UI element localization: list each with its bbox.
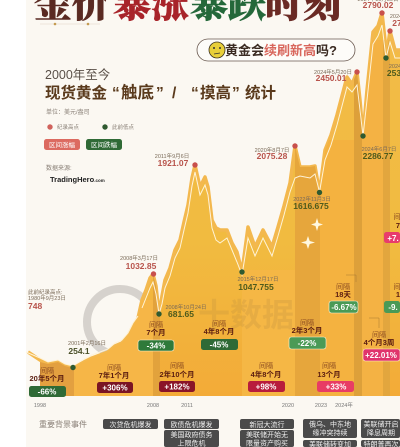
- timeline years: [34, 401, 353, 409]
- interval: 1980-2001: 20年5个月: [29, 373, 65, 383]
- interval: 1980-2001: -66%: [38, 388, 56, 396]
- interval: 2020-2022: 间隔: [300, 318, 314, 327]
- interval: 2015-2020: 间隔: [259, 361, 273, 370]
- data source: TradingHero.com: [50, 175, 105, 184]
- interval: 4 years 3 months: 4个月3周: [364, 338, 394, 347]
- event: 2024: 降息周期: [367, 428, 395, 437]
- icon: thinking face: [209, 42, 225, 58]
- legend: 此前低点: [112, 123, 135, 131]
- interval: 2001-2008: [97, 363, 133, 393]
- interval: 2008 fall: 7个月: [146, 328, 166, 337]
- watermark ring: [87, 289, 153, 355]
- interval tags: [29, 213, 400, 397]
- label: 1980 record: 此前纪录高点:: [28, 288, 63, 296]
- event: 2011: 美国政府债务: [170, 430, 212, 439]
- label: 2024 May high: [314, 68, 360, 83]
- event: 2011: [164, 419, 219, 447]
- label: latest peak: 2790.02: [363, 0, 394, 10]
- event: 2023: 俄乌、中东地: [309, 420, 351, 428]
- legend: 纪录高点: [57, 123, 80, 131]
- peak and low labels: [28, 0, 400, 370]
- interval: 18 days: 18天: [335, 290, 351, 299]
- label: 1980 record: [28, 288, 66, 311]
- interval: 2008 fall: 间隔: [149, 320, 163, 329]
- interval: right partial down: [384, 283, 400, 313]
- interval: 2008-2011: [159, 361, 195, 392]
- heading: 触底: [121, 82, 154, 102]
- label: 2024 May high: 2450.01: [316, 73, 347, 83]
- interval: 2011-2015: 4年8个月: [204, 326, 234, 336]
- unit: 单位：美元/盎司: [46, 108, 90, 116]
- timeline years: 1998: [34, 403, 46, 409]
- interval: 2015-2020: [248, 361, 285, 392]
- interval: 2001-2008: 间隔: [107, 363, 121, 372]
- interval: 2011-2015: -45%: [210, 340, 228, 350]
- interval: 2015-2020: 4年8个月: [251, 369, 281, 379]
- title: [34, 0, 341, 26]
- label: 2020 high: [255, 143, 298, 161]
- label: 2011 high: 1921.07: [158, 158, 189, 168]
- timeline years: 2011: [181, 403, 193, 409]
- label: 2001 low: 254.1: [68, 346, 90, 356]
- interval: 2022-2024: 13个月: [317, 370, 341, 379]
- label: 1980 record: 748: [28, 301, 42, 311]
- interval: 2008-2011: 间隔: [170, 361, 184, 370]
- heading: [45, 82, 276, 102]
- label: 2008 low: 2008年10月24日: [166, 303, 206, 311]
- timeline years: 2023: [315, 403, 327, 409]
- label: 2008 high: [120, 254, 158, 277]
- label: 2022 low: 1616.675: [293, 201, 329, 211]
- label: 2008 low: [156, 303, 206, 319]
- event: 2023: [303, 419, 357, 447]
- event: 2008: [103, 419, 158, 429]
- label: latest peak: [358, 0, 398, 16]
- label: 2015 low: [238, 269, 278, 292]
- sparkles: [301, 218, 323, 249]
- event: 2023: 缘冲突持续: [312, 428, 348, 437]
- legend: 区间跌幅: [91, 140, 118, 149]
- subtitle: 2000年至今: [45, 67, 111, 82]
- label: 1980 record: 1980年9月23日: [28, 294, 66, 302]
- interval: 2022-2024: [317, 361, 354, 392]
- label: recent low: [383, 55, 400, 78]
- data source: [46, 164, 105, 184]
- interval: 18 days: 间隔: [336, 282, 350, 291]
- legend: 区间涨幅: [49, 140, 76, 149]
- interval: 4 years 3 months: +22.01%: [365, 351, 397, 360]
- interval: 1980-2001: 间隔: [40, 366, 54, 375]
- label: 2011 high: [155, 152, 198, 168]
- interval: 2020-2022: [289, 318, 326, 349]
- interval: right partial up: +7.: [387, 234, 399, 243]
- heading: 摸高: [200, 83, 231, 102]
- watermark text: 十数据: [198, 297, 294, 333]
- interval: 2001-2008: 7年1个月: [99, 370, 129, 380]
- question pill: [197, 39, 355, 61]
- interval: 4 years 3 months: [363, 318, 400, 361]
- interval: 2011-2015: 间隔: [212, 319, 226, 328]
- interval: 1980-2001: [29, 366, 66, 397]
- heading: 统计: [245, 83, 276, 102]
- legend: [44, 123, 135, 150]
- interval: right partial up: 7: [396, 221, 400, 230]
- interval: right partial down: -9.: [388, 303, 398, 312]
- event: 2011: 欧债危机爆发: [170, 420, 212, 429]
- interval: right partial down: 1: [396, 290, 400, 299]
- timeline years: 2024年: [335, 401, 353, 409]
- label: 2008 high: 1032.85: [126, 261, 157, 271]
- interval: 4 years 3 months: 间隔: [372, 330, 386, 339]
- interval: 2008-2011: 2年10个月: [159, 369, 195, 379]
- event: 2020: 新冠大流行: [250, 420, 284, 429]
- interval: 2001-2008: +306%: [102, 384, 128, 392]
- label: 2011 high: 2011年9月6日: [155, 152, 189, 160]
- interval: 2022-2024: +33%: [326, 382, 346, 392]
- event: 2020: [240, 419, 294, 447]
- interval: 2015-2020: +98%: [256, 382, 276, 392]
- timeline years: 2008: [147, 403, 159, 409]
- label: 2024 low: 2024年6月7日: [362, 145, 396, 153]
- event: 2008: 次贷危机爆发: [110, 420, 152, 429]
- heading: /: [172, 85, 177, 102]
- question pill: 黄金会续刷新高吗?: [225, 43, 337, 58]
- label: 2022 low: 2022年11月3日: [293, 195, 331, 203]
- label: 2022 low: [293, 190, 331, 211]
- interval: 2008 fall: -34%: [147, 342, 165, 350]
- heading: “: [191, 85, 199, 102]
- timeline years: 2020: [282, 403, 294, 409]
- interval: 18 days: [329, 275, 358, 313]
- label: 2020 high: 2020年8月7日: [255, 146, 289, 154]
- heading: “: [112, 85, 120, 102]
- interval: 2008-2011: +182%: [164, 382, 190, 392]
- label: 2008 high: 2008年3月17日: [120, 254, 158, 262]
- events label: 重要背景事件: [39, 419, 87, 429]
- label: 2001 low: [68, 339, 106, 370]
- interval: right partial up: [384, 213, 400, 243]
- label: 2001 low: 2001年2月16日: [68, 339, 106, 347]
- label: 2015 low: 1047.755: [238, 282, 274, 292]
- event: 2024: [361, 419, 400, 447]
- heading: ”: [232, 85, 240, 102]
- label: 2024 May high: 2024年5月20日: [314, 68, 352, 76]
- interval: 2020-2022: 2年3个月: [292, 325, 322, 335]
- label: 2024 low: 2286.77: [363, 151, 394, 161]
- heading: 现货黄金: [45, 83, 108, 102]
- event: 2020: 美联储开始无: [246, 430, 288, 439]
- title ornament: [40, 23, 100, 25]
- event: 2024: 美联储开启: [364, 420, 398, 428]
- interval: 2008 fall: [138, 320, 174, 351]
- interval: 2020-2022: -22%: [298, 339, 316, 348]
- label: 2008 low: 681.65: [168, 309, 194, 319]
- data source: 数据来源:: [46, 164, 72, 172]
- label: 2024 low: [360, 133, 396, 161]
- interval: 2011-2015: [201, 319, 238, 350]
- label: second peak: [387, 14, 400, 34]
- heading: ”: [156, 85, 164, 102]
- label: 2015 low: 2015年12月17日: [238, 275, 278, 283]
- label: 2020 high: 2075.28: [257, 151, 288, 161]
- interval: 18 days: -6.67%: [331, 303, 357, 312]
- interval: 2022-2024: 间隔: [322, 361, 336, 370]
